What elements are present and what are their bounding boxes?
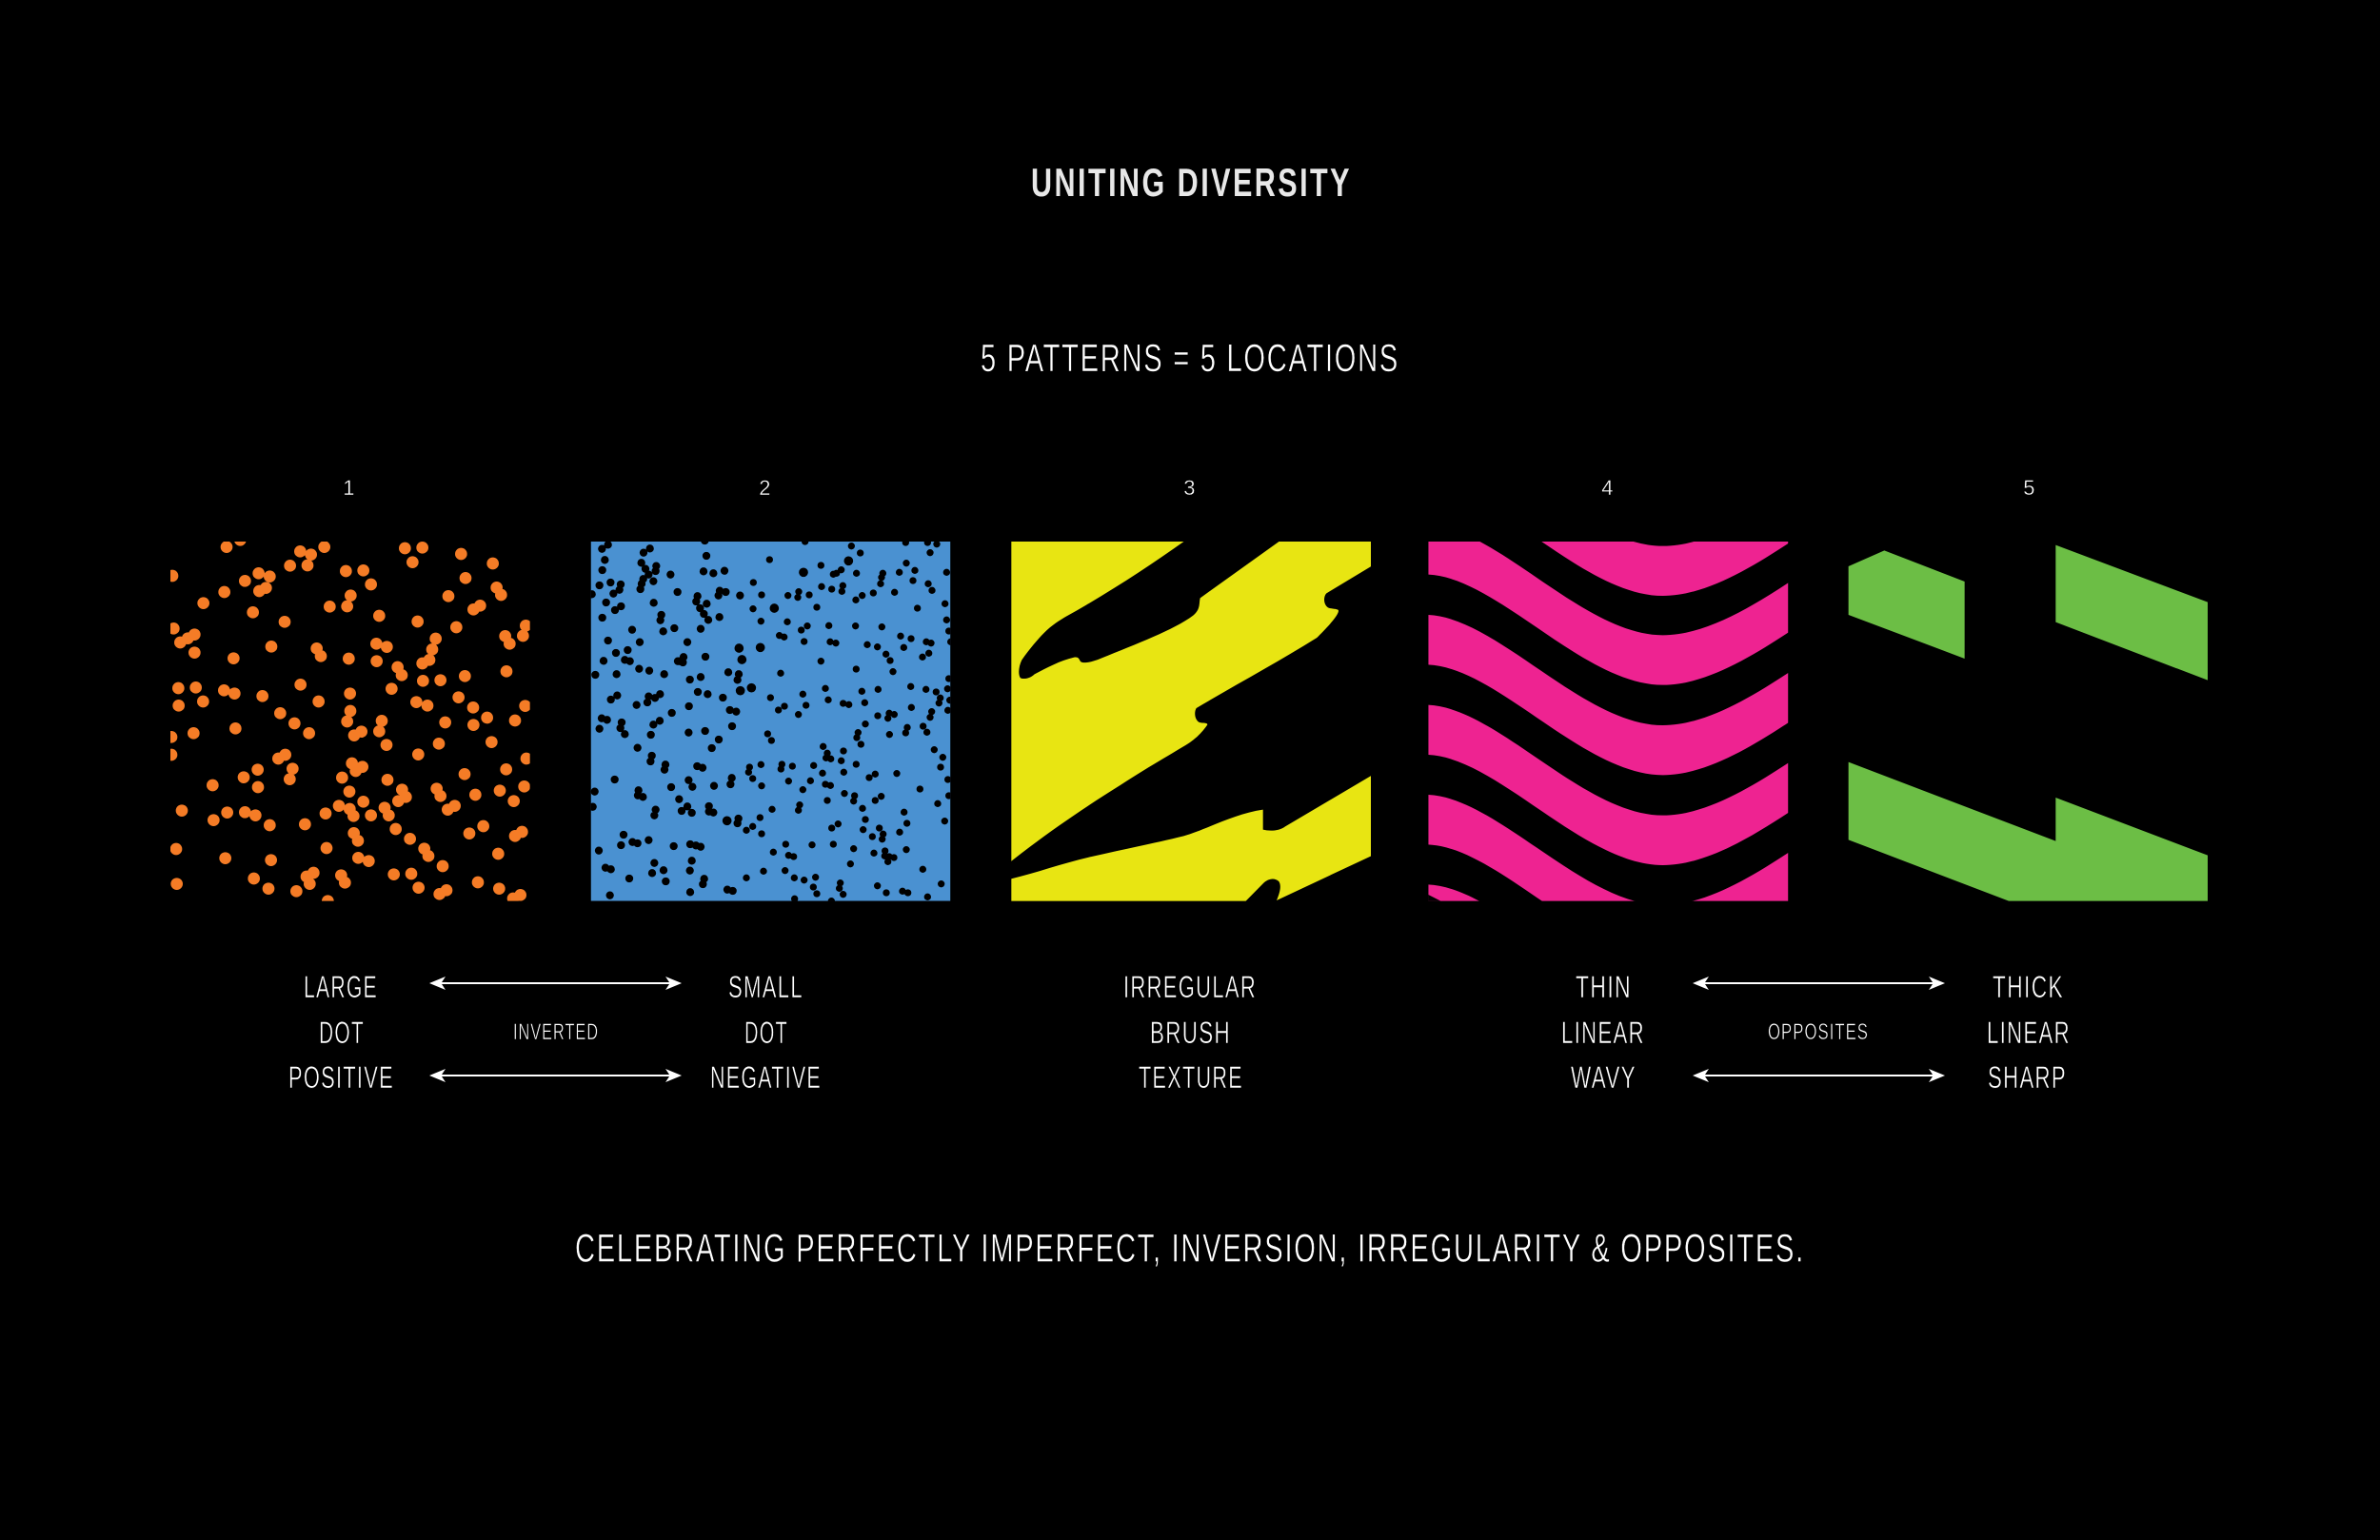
labels: pattern 5 (1987, 970, 2071, 1095)
labels: pattern 3: TEXTURE (1139, 1060, 1243, 1095)
pattern numbers: 5 (2023, 476, 2036, 500)
title: UNITING DIVERSITY (1031, 160, 1352, 205)
labels: pattern 4 (1561, 970, 1645, 1095)
panel: yellow irregular brush texture (1011, 542, 1371, 901)
subtitle: 5 PATTERNS = 5 LOCATIONS (981, 336, 1399, 380)
labels: pattern 2: SMALL (728, 970, 803, 1004)
pattern numbers: 1 (343, 476, 356, 500)
pattern numbers: 2 (759, 476, 772, 500)
labels: pattern 2 (710, 970, 822, 1095)
arrow: thin to thick (1693, 977, 1945, 990)
closing statement: CELEBRATING PERFECTLY IMPERFECT, INVERSION, IRREGULARITY & OPPOSITES. (575, 1226, 1805, 1270)
arrow: wavy to sharp (1693, 1069, 1945, 1082)
panel: orange large dots on black (171, 540, 526, 901)
panel: blue with small black dots (591, 541, 951, 901)
panel: green thick sharp shapes (1849, 545, 2208, 901)
labels: pattern 1 (288, 970, 394, 1095)
arrow: positive to negative (429, 1069, 682, 1082)
panel: pink thin wavy lines (1428, 542, 1788, 901)
pattern numbers: 3 (1183, 476, 1197, 500)
labels: pattern 1: DOT (319, 1016, 365, 1050)
labels: pattern 2: DOT (744, 1016, 788, 1050)
labels: pattern 5: THICK (1993, 970, 2064, 1004)
labels: pattern 1: POSITIVE (288, 1060, 394, 1095)
labels: pattern 2: NEGATIVE (710, 1060, 822, 1095)
labels: pattern 3 (1123, 970, 1257, 1095)
label: opposites: OPPOSITES (1768, 1019, 1869, 1045)
label: inverted: INVERTED (513, 1019, 599, 1045)
labels: pattern 3: BRUSH (1150, 1016, 1231, 1050)
arrow: large to small (429, 977, 682, 990)
labels: pattern 1: LARGE (304, 970, 378, 1004)
labels: pattern 4: WAVY (1571, 1060, 1636, 1095)
labels: pattern 5: LINEAR (1987, 1016, 2071, 1050)
pattern numbers: 4 (1601, 476, 1615, 500)
labels: pattern 5: SHARP (1988, 1060, 2067, 1095)
labels: pattern 4: THIN (1576, 970, 1632, 1004)
labels: pattern 4: LINEAR (1561, 1016, 1645, 1050)
labels: pattern 3: IRREGULAR (1123, 970, 1257, 1004)
pattern numbers (343, 476, 2036, 500)
